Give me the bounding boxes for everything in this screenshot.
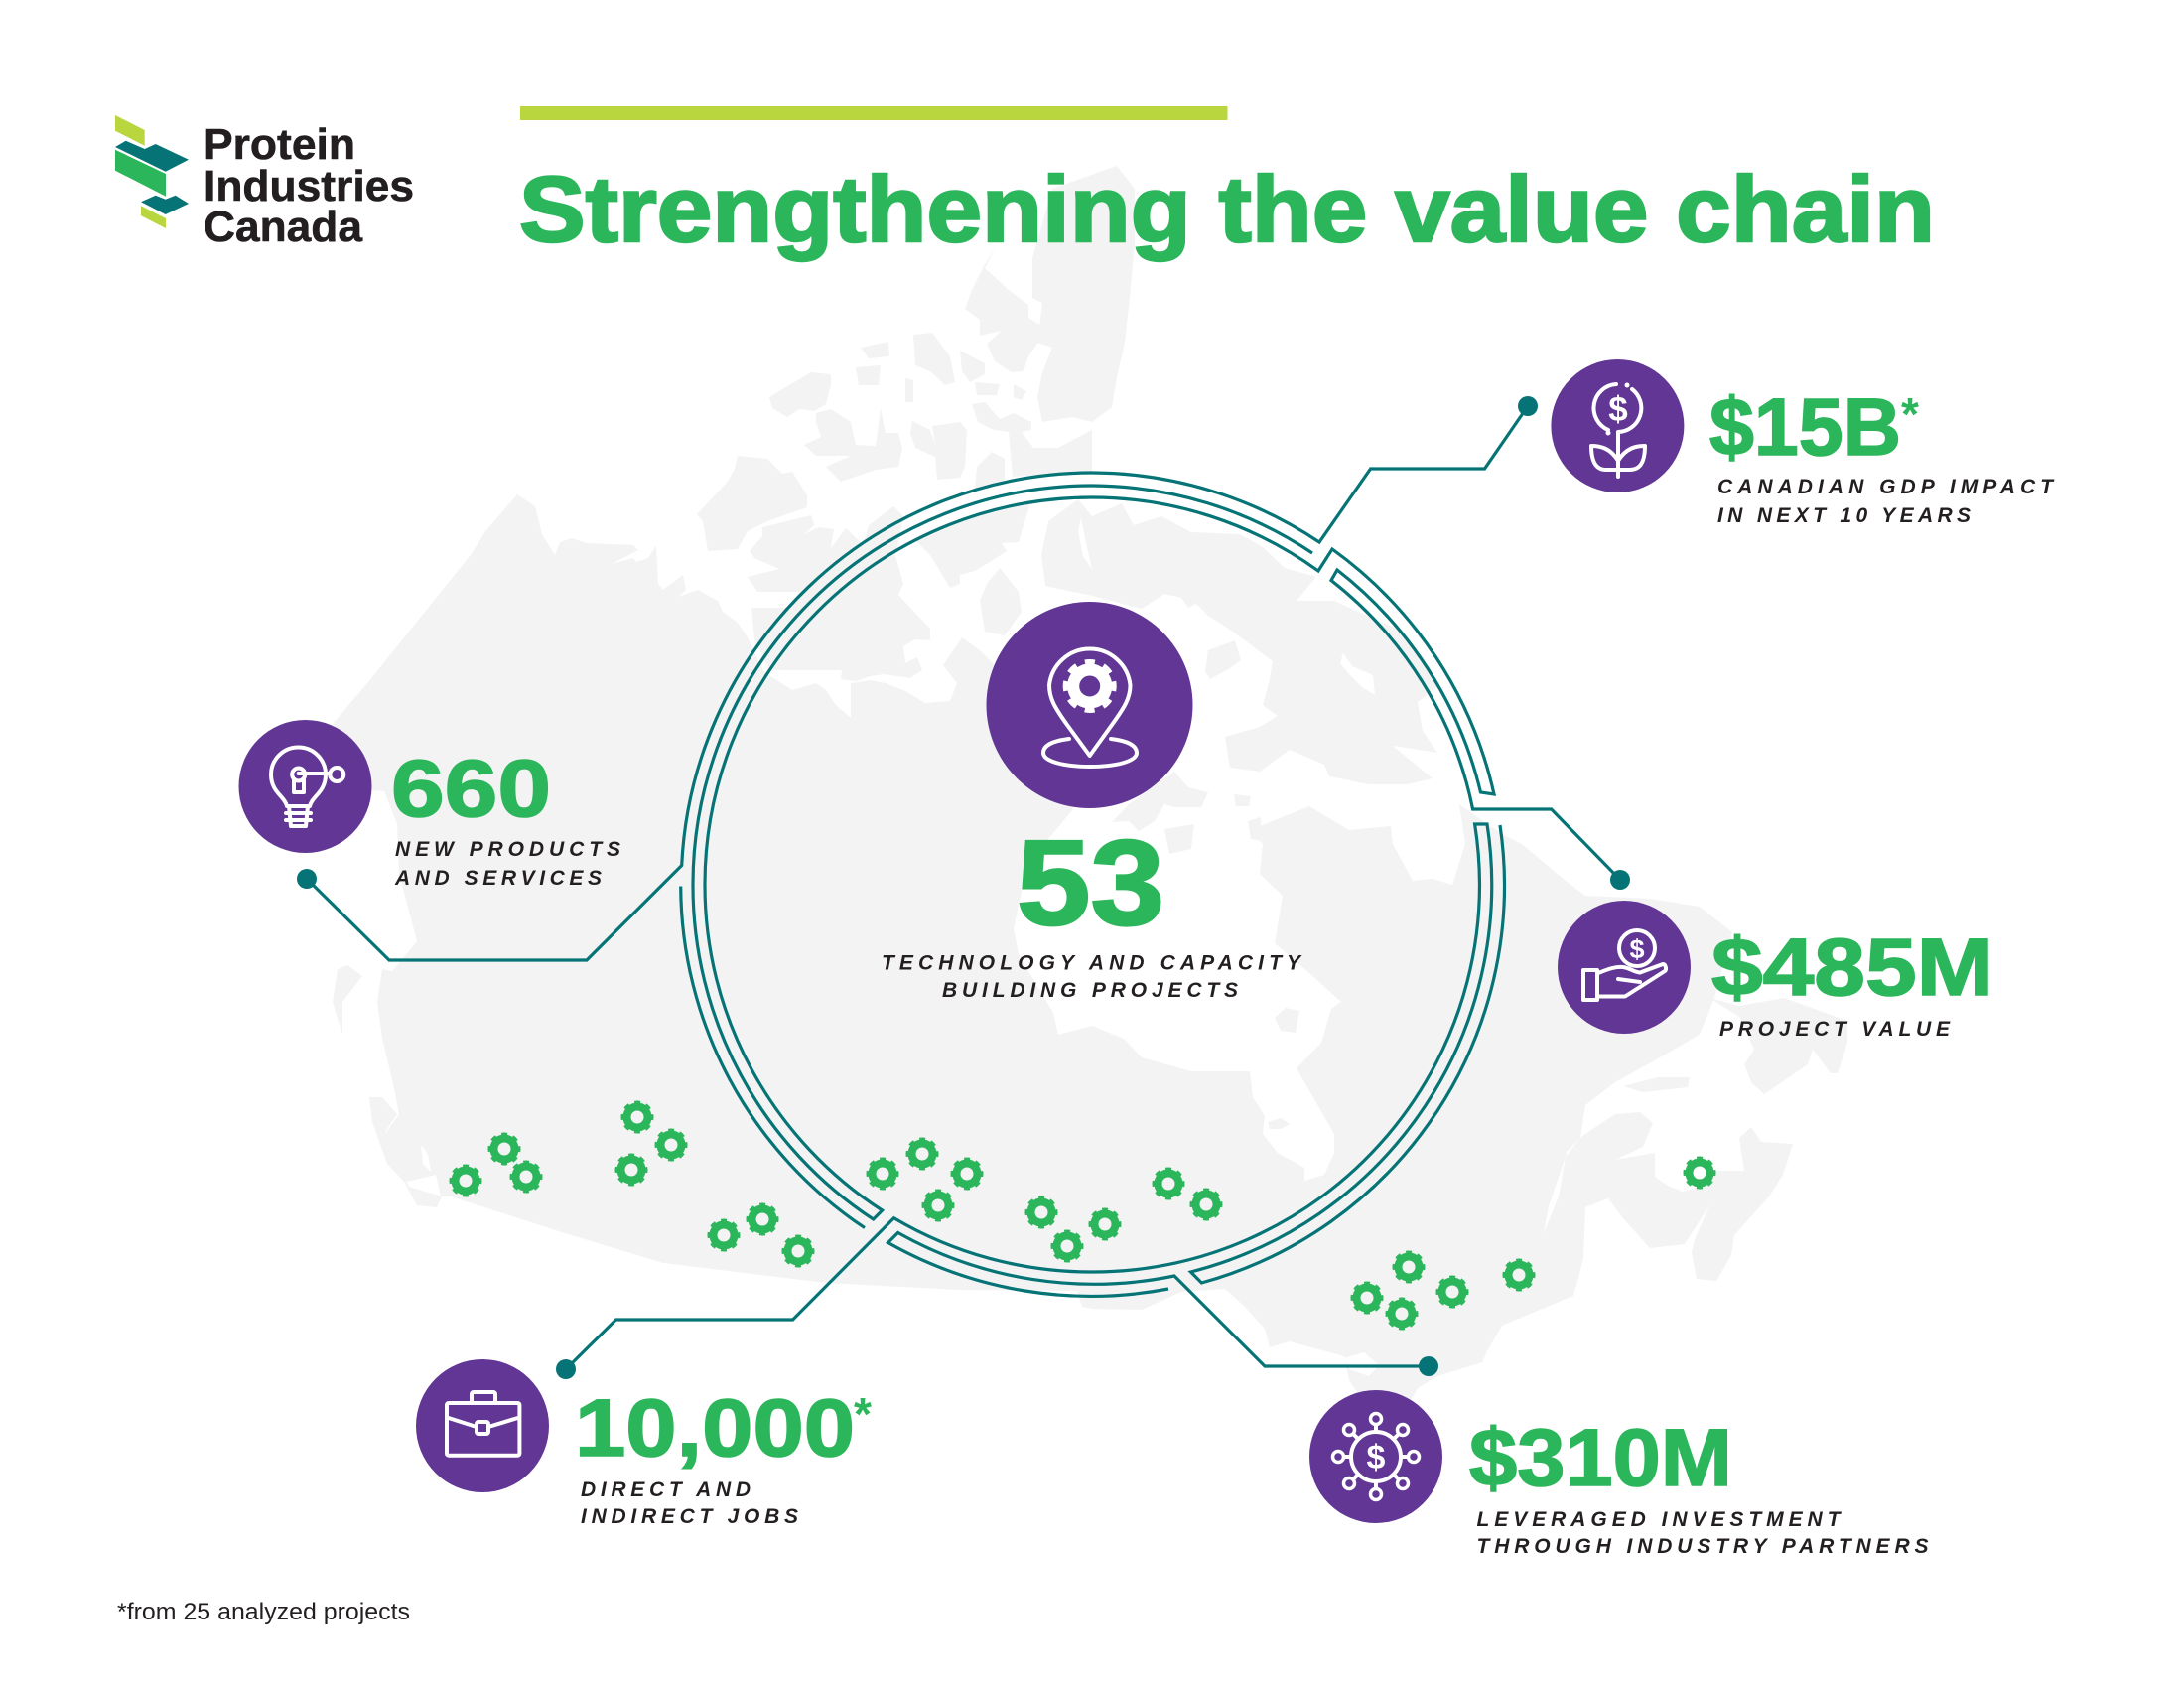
value: $485M: $485M	[1711, 922, 1993, 1013]
project gear markers	[451, 1102, 1713, 1329]
icon: dollar network: $	[1367, 1439, 1386, 1477]
label: technology and capacity building projects: BUILDING PROJECTS	[942, 979, 1238, 1002]
value: 10,000: *	[854, 1388, 872, 1440]
accent bar	[520, 106, 1227, 120]
logo mark	[115, 115, 189, 228]
value: 660: 660	[391, 744, 551, 834]
logo wordmark: Canada	[204, 203, 363, 251]
label: technology and capacity building projects: TECHNOLOGY AND CAPACITY	[882, 951, 1302, 975]
label: direct and indirect jobs	[581, 1478, 798, 1528]
label: Canadian GDP impact: IN NEXT 10 YEARS	[1717, 504, 1971, 527]
logo wordmark: Industries	[204, 162, 414, 211]
icon: map pin with gear	[987, 602, 1193, 808]
stat: $485M project value	[1558, 901, 1993, 1041]
value: 10,000: 10,000	[575, 1383, 855, 1474]
icon: money plant: $	[1608, 390, 1628, 429]
label: leveraged investment through industry partners: LEVERAGED INVESTMENT	[1477, 1508, 1843, 1531]
label: new products and services: AND SERVICES	[394, 867, 602, 890]
label: project value: PROJECT VALUE	[1719, 1018, 1951, 1041]
central stat: 53 projects	[882, 602, 1302, 1002]
value: $310M: $310M	[1469, 1413, 1732, 1503]
icon: hand holding coin: $	[1629, 934, 1645, 964]
label: new products and services: NEW PRODUCTS	[395, 838, 620, 861]
stat: 10,000 jobs	[416, 1359, 872, 1528]
icon: money plant	[1551, 359, 1684, 492]
title: Strengthening the value chain	[519, 157, 1935, 261]
icon: dollar network	[1309, 1390, 1442, 1523]
stat: $15B GDP impact	[1551, 359, 2055, 527]
icon: light bulb	[238, 720, 371, 853]
value: 53: 53	[1017, 815, 1164, 950]
logo wordmark: Protein	[204, 120, 355, 169]
value: $15B: $15B	[1709, 382, 1901, 473]
label: leveraged investment through industry partners	[1477, 1508, 1928, 1558]
icon: briefcase	[416, 1359, 549, 1492]
logo wordmark	[204, 120, 414, 251]
logo: Protein Industries Canada	[115, 115, 414, 251]
label: direct and indirect jobs: INDIRECT JOBS	[581, 1505, 798, 1528]
label: direct and indirect jobs: DIRECT AND	[581, 1478, 751, 1501]
label: new products and services	[394, 838, 620, 890]
label: Canadian GDP impact	[1717, 476, 2055, 527]
stat: 660 new products	[238, 720, 620, 890]
label: technology and capacity building projects	[882, 951, 1302, 1002]
value: $15B: *	[1901, 388, 1919, 440]
ring with connector lines	[297, 396, 1630, 1379]
stat: $310M leveraged investment	[1309, 1390, 1928, 1558]
footnote: *from 25 analyzed projects	[117, 1599, 410, 1625]
map of Canada background	[333, 166, 1847, 1406]
label: leveraged investment through industry partners: THROUGH INDUSTRY PARTNERS	[1477, 1535, 1928, 1558]
label: Canadian GDP impact: CANADIAN GDP IMPACT	[1717, 476, 2055, 498]
icon: hand holding coin	[1558, 901, 1691, 1034]
